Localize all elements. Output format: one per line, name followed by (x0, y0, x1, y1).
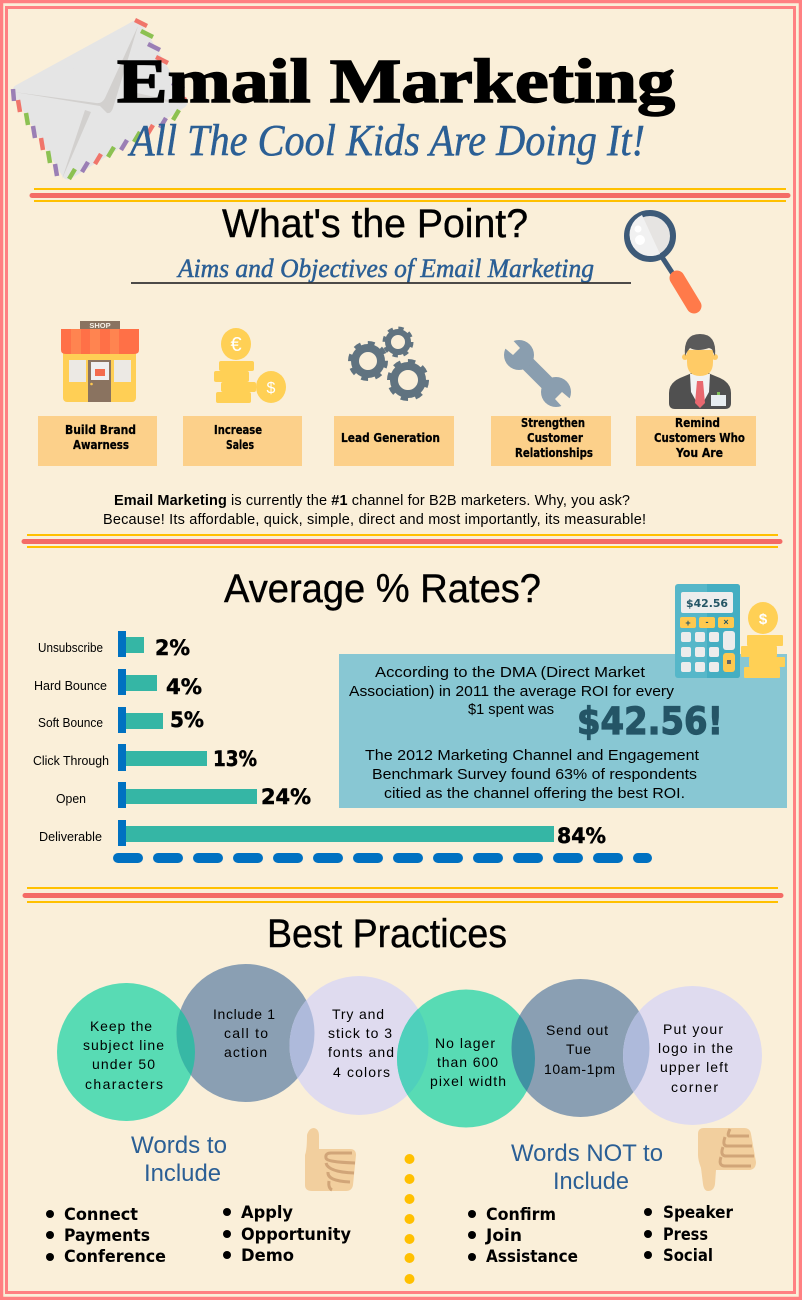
circles: tips: pixel width (430, 1073, 506, 1089)
panel: what's the point (38, 202, 756, 528)
text block: intro (103, 493, 646, 528)
list: words not to include, column 1: Join (485, 1226, 522, 1246)
icon: wrench (501, 336, 574, 411)
heading: words to include (131, 1132, 227, 1187)
list: words to include, column 1: Payments (64, 1226, 150, 1246)
heading: average rates: Average % Rates? (224, 567, 541, 611)
callout: ROI: citied as the channel offering the best ROI. (384, 785, 685, 802)
circles: tips: under 50 (92, 1056, 155, 1072)
list: words to include, column 2: Apply (241, 1203, 293, 1223)
list: words not to include, column 2 (644, 1203, 734, 1266)
list: words to include, column 2: Demo (241, 1246, 294, 1266)
icon: thumbs up (305, 1128, 356, 1191)
icon: shop: SHOP (89, 321, 111, 330)
circles: tips: Try and (332, 1006, 384, 1022)
bar chart: Soft Bounce (38, 715, 103, 730)
icon: calculator and coins: $42.56 (686, 597, 728, 610)
circles: tips: Put your (663, 1021, 723, 1037)
bar chart: Hard Bounce (34, 678, 107, 693)
list: words to include, column 2 (223, 1203, 351, 1266)
bar chart (33, 631, 647, 858)
bar chart: Open (56, 791, 86, 806)
icon: coins (214, 328, 286, 403)
icon: magnifying glass (627, 213, 694, 306)
circles: tips: logo in the (658, 1040, 733, 1056)
bar chart: Unsubscribe (38, 640, 103, 655)
heading: what's the point: What's the Point? (222, 202, 528, 246)
list: words to include, column 2: Opportunity (241, 1225, 351, 1245)
circles: tips: stick to 3 (328, 1025, 392, 1041)
callout: ROI: The 2012 Marketing Channel and Engagement (365, 747, 700, 764)
circles: tips: characters (85, 1076, 163, 1092)
label: remind customers: Customers Who (654, 431, 745, 445)
label: increase sales: Increase (214, 423, 262, 437)
dotted divider (404, 1154, 414, 1284)
icon: businessman (669, 334, 731, 409)
list: words not to include, column 1: Confirm (486, 1205, 556, 1225)
heading: best practices: Best Practices (267, 912, 507, 956)
icon: calculator and coins (675, 584, 785, 678)
list: words to include, column 1 (46, 1205, 166, 1267)
circles: tips: upper left (660, 1059, 728, 1075)
circles: tips: fonts and (328, 1044, 394, 1060)
icon: shop (61, 321, 139, 402)
icon: gears (351, 329, 426, 398)
icon: coins: € (230, 334, 242, 356)
list: words not to include, column 1: Assistance (486, 1247, 578, 1267)
callout: ROI: Association) in 2011 the average ROI for every (349, 683, 675, 700)
callout: ROI: $1 spent was (468, 701, 554, 718)
label: strengthen relationships (491, 416, 611, 466)
text block: intro: Because! Its affordable, quick, simple, direct and most importantly, its measurable! (103, 512, 646, 528)
label: remind customers: Remind (675, 416, 720, 430)
circles: tips: 4 colors (333, 1064, 390, 1080)
callout: ROI: Benchmark Survey found 63% of respondents (372, 766, 697, 783)
text block: intro: Email Marketing is currently the #1 channel for B2B marketers. Why, you ask? (114, 493, 630, 509)
label: strengthen relationships: Customer (527, 431, 583, 445)
heading: words to include: Words to (131, 1132, 227, 1159)
label: increase sales: Sales (226, 438, 254, 452)
circles: tips: action (224, 1044, 267, 1060)
list: words not to include, column 2: Social (663, 1246, 713, 1266)
bar chart: 4% (166, 675, 202, 699)
bar chart: 24% (261, 785, 311, 809)
icon: coins: $ (267, 380, 276, 397)
circles: tips: subject line (83, 1037, 164, 1053)
circles: tips: than 600 (437, 1054, 498, 1070)
list: words not to include, column 1 (468, 1205, 578, 1267)
list: words not to include, column 2: Speaker (663, 1203, 734, 1223)
callout: ROI (339, 654, 787, 808)
list: words to include, column 1: Connect (64, 1205, 138, 1225)
title: Email Marketing (117, 48, 675, 116)
heading: words not to include (511, 1140, 663, 1195)
circles: tips: Send out (546, 1022, 608, 1038)
icon: calculator and coins: - (706, 617, 708, 627)
underline (131, 282, 631, 284)
label: build brand (38, 416, 157, 466)
icon: airmail envelope (13, 20, 186, 179)
label: remind customers (636, 416, 756, 466)
circles: tips (57, 964, 762, 1128)
icon: calculator and coins: × (723, 617, 729, 627)
label: lead generation (334, 416, 454, 466)
callout: ROI: $42.56! (577, 700, 723, 743)
heading: words not to include: Words NOT to (511, 1140, 663, 1167)
label: build brand: Build Brand (65, 423, 136, 437)
callout: ROI: According to the DMA (Direct Market (375, 664, 646, 681)
subheading: aims and objectives: Aims and Objectives of Email Marketing (176, 254, 594, 283)
label: increase sales (183, 416, 302, 466)
bar chart: 5% (170, 708, 204, 732)
subtitle: All The Cool Kids Are Doing It! (127, 116, 645, 165)
label: strengthen relationships: Strengthen (521, 416, 585, 430)
heading: words to include: Include (144, 1160, 221, 1187)
bar chart: 84% (557, 824, 606, 848)
circles: tips: Keep the (90, 1018, 152, 1034)
icon: calculator and coins: + (685, 618, 691, 628)
bar chart: Deliverable (39, 829, 102, 844)
circles: tips: Tue (566, 1041, 591, 1057)
label: remind customers: You Are (675, 446, 723, 460)
label: lead generation: Lead Generation (341, 431, 440, 445)
list: words to include, column 1: Conference (64, 1247, 166, 1267)
circles: tips: Include 1 (213, 1006, 275, 1022)
circles: tips: No lager (435, 1035, 495, 1051)
circles: tips: 10am-1pm (544, 1061, 615, 1077)
list: words not to include, column 2: Press (663, 1225, 708, 1245)
heading: words not to include: Include (553, 1168, 629, 1195)
panel: average rates (33, 567, 787, 858)
panel: best practices (46, 912, 762, 1284)
label: build brand: Awarness (73, 438, 129, 452)
label: strengthen relationships: Relationships (515, 446, 593, 460)
bar chart: 13% (213, 747, 257, 771)
circles: tips: corner (671, 1079, 718, 1095)
bar chart: 2% (155, 636, 190, 660)
bar chart: Click Through (33, 753, 109, 768)
icon: thumbs down (698, 1128, 756, 1191)
icon: calculator and coins: $ (759, 611, 768, 628)
circles: tips: call to (224, 1025, 268, 1041)
